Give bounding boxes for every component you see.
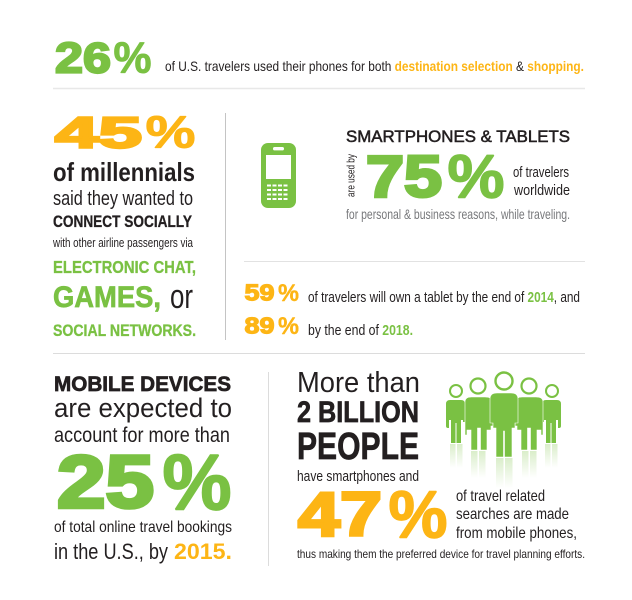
text: games, or: or (170, 278, 193, 316)
heading: mobile devices: MOBILE DEVICES (54, 372, 231, 396)
text: in the U.S., by 2015: 2015. (174, 539, 232, 564)
text: games, or: GAMES, (53, 281, 161, 314)
text: of total online travel bookings: of total online travel bookings (54, 519, 232, 536)
text: thus making them: thus making them the preferred device for travel planning efforts. (297, 547, 585, 561)
25% figure: % (162, 438, 232, 526)
person inner right (515, 378, 543, 450)
text: of travelers worldwide: of travelers (513, 164, 569, 181)
25% figure: 25 (57, 440, 154, 524)
icon: smartphone (261, 143, 296, 208)
text: of travel related searches: of travel related (456, 488, 545, 505)
26% figure: 26 (55, 34, 111, 82)
panel: 45% of millennials (52, 106, 196, 340)
text: of travel related searches: from mobile phones, (456, 525, 577, 542)
person outer right (542, 385, 561, 443)
text: with other airline passengers: with other airline passengers via (52, 235, 194, 250)
25% figure (57, 438, 232, 526)
panel: tablet ownership (244, 280, 580, 340)
26% caption: of U.S. travelers used their phones for both destination selection & shopping. (165, 58, 584, 74)
89% figure: 89 (244, 312, 274, 338)
person outer left (446, 385, 465, 443)
heading: smartphones & tablets: SMARTPHONES & TABLETS (346, 127, 570, 146)
text: are expected to: are expected to (54, 393, 232, 423)
panel: 2 billion people 47% (297, 367, 585, 561)
person centre (490, 372, 518, 457)
rotated text: are used by: are used by (346, 154, 358, 197)
47% figure: 47 (298, 480, 382, 550)
text: in the U.S., by 2015: in the U.S., by (54, 539, 168, 564)
heading: people: PEOPLE (297, 426, 419, 468)
45% figure (55, 106, 196, 158)
75% figure (366, 142, 504, 210)
45% figure: % (146, 106, 196, 158)
text: by end of 2018: by the end of 2018. (308, 323, 413, 339)
text: of travelers worldwide: worldwide (513, 182, 570, 199)
heading: of millennials: of millennials (53, 157, 195, 187)
59% figure: % (278, 280, 299, 307)
person inner left (465, 378, 493, 450)
75% figure: 75 (366, 144, 442, 210)
text: more than: More than (297, 367, 420, 399)
text: of travel related searches (456, 488, 577, 542)
panel: mobile devices 25% (54, 372, 232, 564)
89% figure: % (278, 313, 299, 340)
47% figure: % (388, 478, 448, 552)
panel: smartphones and tablets 75% (346, 127, 570, 222)
26% figure: % (114, 34, 152, 82)
text: electronic chat: ELECTRONIC CHAT, (53, 257, 196, 277)
text: connect socially: CONNECT SOCIALLY (53, 213, 192, 231)
59% figure (244, 280, 299, 307)
45% figure: 45 (55, 108, 142, 158)
text: said they wanted to: said they wanted to (53, 188, 193, 210)
text: tablet by 2014: of travelers will own a tablet by the end of 2014, and (308, 290, 580, 306)
text: of travel related searches: searches are made (456, 506, 569, 523)
text: social networks: SOCIAL NETWORKS. (53, 322, 196, 340)
59% figure: 59 (244, 280, 274, 306)
text: have smartphones and: have smartphones and (297, 468, 419, 485)
47% figure (298, 478, 448, 552)
icon: group of people (446, 372, 561, 488)
stat: 26% of U.S. travelers (55, 34, 584, 82)
reflections (450, 444, 558, 488)
heading: 2 billion: 2 BILLION (297, 396, 419, 429)
75% figure: % (448, 142, 504, 210)
26% figure (55, 34, 152, 82)
89% figure (244, 312, 299, 340)
text: of travelers worldwide (513, 164, 570, 199)
text: account for more than: account for more than (54, 424, 230, 447)
